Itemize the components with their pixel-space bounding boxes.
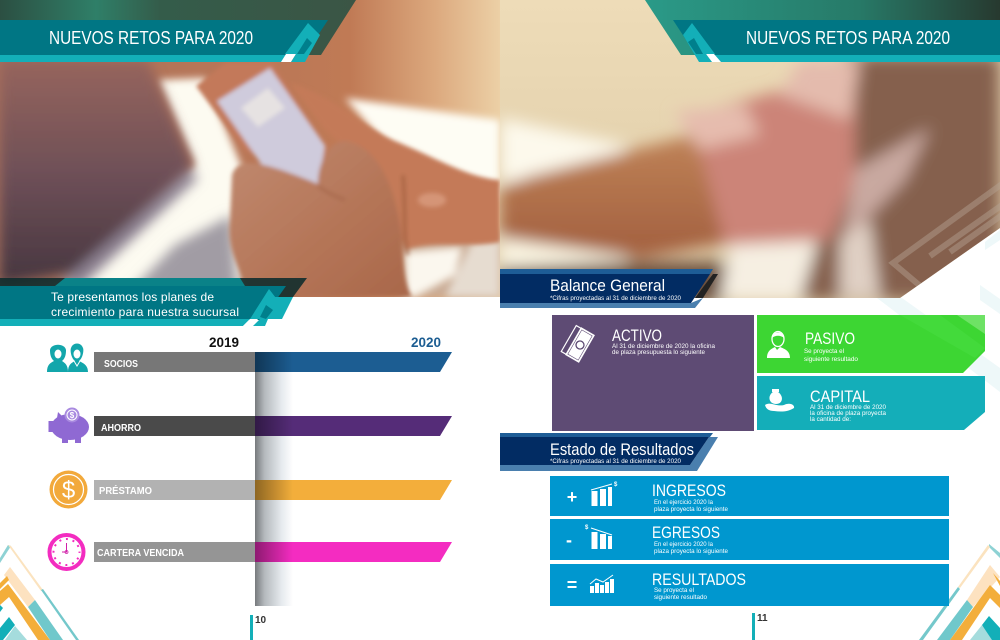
panel: egresos: En el ejercicio 2020 la xyxy=(654,542,714,548)
year labels xyxy=(209,334,441,350)
heading: estado de resultados: *Cifras proyectadas al 31 de diciembre de 2020 xyxy=(550,459,682,465)
panel: activo xyxy=(552,315,754,431)
row: cartera vencida: CARTERA VENCIDA xyxy=(97,548,184,559)
icon: people xyxy=(47,344,88,372)
heading: balance general xyxy=(500,269,718,308)
row: ahorro: AHORRO xyxy=(101,423,141,434)
panel: activo: ACTIVO xyxy=(612,326,662,345)
panel: pasivo: PASIVO xyxy=(805,329,855,348)
year labels: 2019 xyxy=(209,334,239,350)
icon: trend bars xyxy=(590,575,614,593)
icon: dollar coin: $ xyxy=(62,477,75,504)
panel: capital xyxy=(757,376,985,430)
row: prestamo xyxy=(50,470,452,508)
photo: hands holding phone over laptop xyxy=(0,0,500,297)
icon: falling bars: $ xyxy=(585,525,589,531)
fold shadow xyxy=(255,372,293,606)
year labels: 2020 xyxy=(411,334,441,350)
panel: activo: de plaza presupuesta lo siguiente xyxy=(612,349,705,356)
panel: capital: Al 31 de diciembre de 2020 xyxy=(810,404,886,411)
panel: capital: la cantidad de: xyxy=(810,416,851,423)
panel: activo: Al 31 de diciembre de 2020 la oficina xyxy=(612,343,715,350)
icon: person xyxy=(767,332,790,358)
panel: resultados: = xyxy=(567,575,577,595)
intro banner xyxy=(0,278,307,326)
icon: piggy bank xyxy=(48,408,89,443)
panel: resultados: siguiente resultado xyxy=(654,595,708,601)
decoration: pale stripes on right page xyxy=(877,230,1000,392)
row: cartera vencida xyxy=(50,535,452,569)
panel: ingresos: INGRESOS xyxy=(652,482,726,500)
title left: NUEVOS RETOS PARA 2020 xyxy=(49,28,253,48)
panel: resultados: RESULTADOS xyxy=(652,571,746,589)
icon: hand with money bag xyxy=(765,389,794,412)
right header banner xyxy=(645,0,1000,62)
panel: pasivo xyxy=(757,315,985,373)
icon: banknotes xyxy=(561,325,595,363)
photo: blurred arm in pink sleeve xyxy=(500,0,1000,302)
intro text: crecimiento para nuestra sucursal xyxy=(51,305,239,319)
page number 10 xyxy=(250,615,267,640)
icon: falling bars xyxy=(585,525,612,549)
panel: pasivo: Se proyecta el xyxy=(804,348,845,355)
heading: estado de resultados xyxy=(500,433,718,471)
decoration: triangles bottom left xyxy=(0,545,79,640)
page number 11 xyxy=(752,613,768,640)
heading: balance general: Balance General xyxy=(550,276,665,295)
panel: pasivo: siguiente resultado xyxy=(804,356,858,363)
page number 10: 10 xyxy=(255,615,267,626)
panel: capital: CAPITAL xyxy=(810,387,870,406)
row: socios: SOCIOS xyxy=(104,359,138,370)
panel: ingresos: En el ejercicio 2020 la xyxy=(654,500,714,506)
intro text: Te presentamos los planes de xyxy=(51,290,214,304)
title right: NUEVOS RETOS PARA 2020 xyxy=(746,28,950,48)
row: socios xyxy=(47,344,452,372)
icon: clock xyxy=(50,535,84,569)
icon: rising bars: $ xyxy=(614,482,618,488)
panel: egresos xyxy=(550,519,949,560)
panel: egresos: EGRESOS xyxy=(652,524,720,542)
icon: rising bars xyxy=(591,482,618,506)
heading: estado de resultados: Estado de Resultados xyxy=(550,440,694,459)
panel: ingresos: + xyxy=(567,487,577,507)
decoration: triangles bottom right xyxy=(919,544,1000,640)
left header banner xyxy=(0,0,356,62)
panel: egresos: - xyxy=(566,530,572,550)
panel: ingresos: plaza proyecta lo siguiente xyxy=(654,507,729,513)
panel: resultados: Se proyecta el xyxy=(654,588,694,594)
panel: resultados xyxy=(550,564,949,606)
page number 11: 11 xyxy=(757,613,768,624)
icon: dollar coin xyxy=(50,470,88,508)
panel: ingresos xyxy=(550,476,949,516)
row: prestamo: PRÉSTAMO xyxy=(99,484,152,497)
row: ahorro xyxy=(48,408,452,443)
heading: balance general: *Cifras proyectadas al 31 de diciembre de 2020 xyxy=(550,296,682,302)
icon: piggy bank: $ xyxy=(70,411,75,420)
panel: egresos: plaza proyecta lo siguiente xyxy=(654,549,729,555)
panel: capital: la oficina de plaza proyecta xyxy=(810,410,886,417)
